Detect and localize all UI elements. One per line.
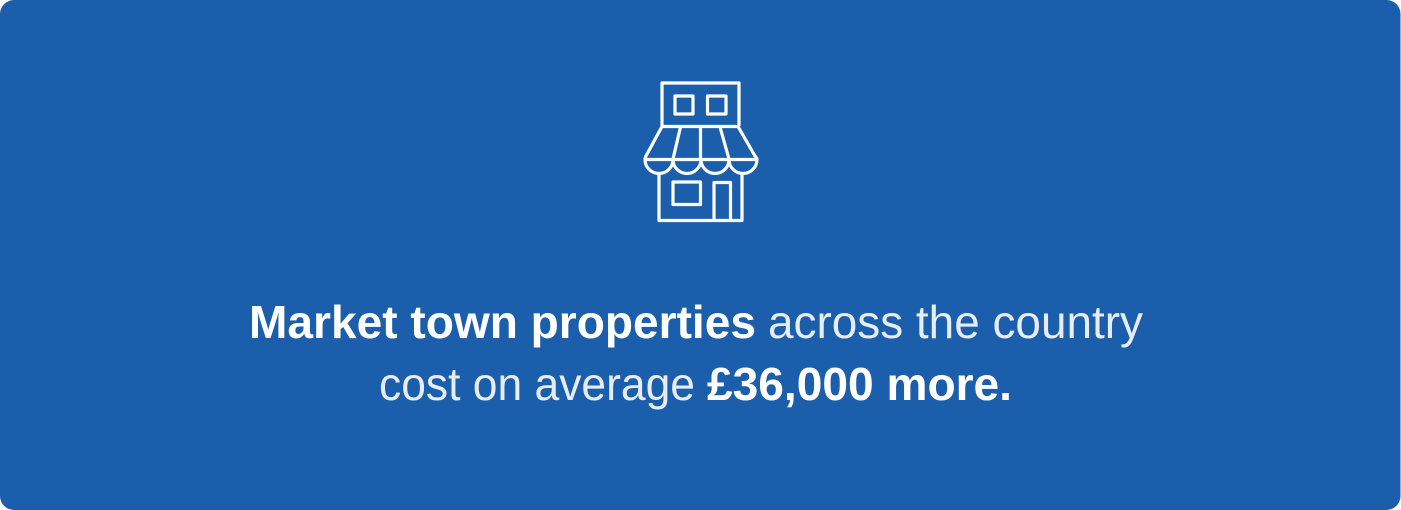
headline line 1 xyxy=(249,296,1143,348)
headline line 1: across the country xyxy=(768,296,1143,348)
icon: market shop xyxy=(645,83,757,220)
headline line 2 xyxy=(379,358,1012,410)
headline line 2: £36,000 more. xyxy=(707,358,1012,410)
headline text xyxy=(249,296,1143,410)
headline line 1: Market town properties xyxy=(249,296,756,348)
headline line 2: cost on average xyxy=(379,358,695,410)
